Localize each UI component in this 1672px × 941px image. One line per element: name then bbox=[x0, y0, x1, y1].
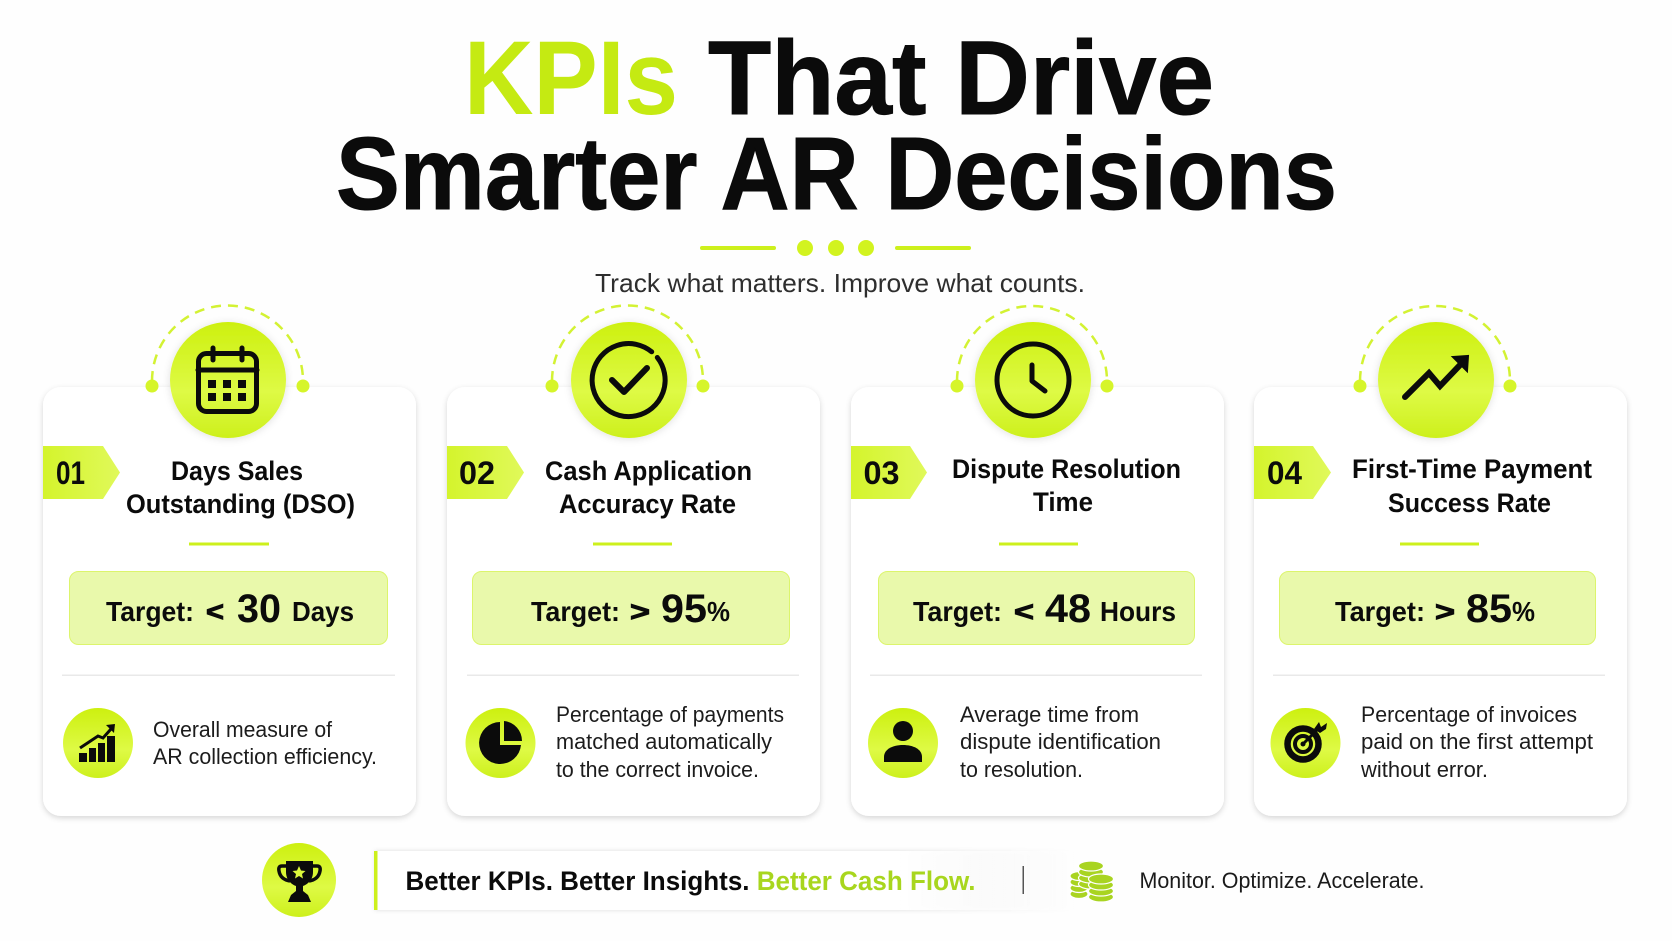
footer slogan: Monitor. Optimize. Accelerate. bbox=[1140, 868, 1424, 893]
card title bbox=[545, 456, 752, 519]
card title: Dispute Resolution bbox=[952, 454, 1181, 484]
target box: % bbox=[707, 596, 730, 627]
card title: Accuracy Rate bbox=[559, 489, 736, 519]
divider with dots bbox=[700, 240, 971, 256]
number badge 04 bbox=[1254, 446, 1331, 499]
description bbox=[960, 702, 1161, 782]
description: without error. bbox=[1360, 757, 1488, 782]
target box: % bbox=[1512, 596, 1535, 627]
title bbox=[336, 20, 1337, 231]
target box: Target: bbox=[531, 596, 620, 627]
card title: First-Time Payment bbox=[1352, 454, 1592, 484]
number badge 01: 01 bbox=[56, 455, 85, 491]
number badge 02 bbox=[447, 446, 524, 499]
card title: Days Sales bbox=[171, 456, 303, 486]
subtitle: Track what matters. Improve what counts. bbox=[595, 268, 1085, 298]
title: That Drive bbox=[708, 20, 1214, 137]
target box bbox=[878, 572, 1194, 644]
panel: card 01 Days Sales Outstanding bbox=[43, 306, 416, 816]
title: KPIs bbox=[464, 20, 678, 137]
panel: card 02 Cash Application Accuracy Rate bbox=[447, 306, 820, 816]
target box: Target: bbox=[106, 596, 194, 627]
description bbox=[153, 717, 377, 769]
target box bbox=[1280, 572, 1596, 644]
target box: 30 bbox=[237, 587, 281, 631]
description: to resolution. bbox=[960, 757, 1083, 782]
footer tagline: Better KPIs. Better Insights. Better Cash Flow. bbox=[406, 866, 976, 896]
icon: target bbox=[1270, 708, 1340, 778]
number badge 01 bbox=[43, 446, 120, 499]
description: dispute identification bbox=[960, 729, 1161, 754]
icon: dashed arc bbox=[1354, 306, 1516, 392]
number badge 03 bbox=[851, 446, 927, 499]
target box: Days bbox=[292, 596, 354, 627]
target box: Target: bbox=[1335, 596, 1425, 627]
number badge 02: 02 bbox=[459, 455, 495, 491]
card title bbox=[1352, 454, 1592, 518]
card title bbox=[126, 456, 355, 519]
target box: Hours bbox=[1100, 596, 1176, 627]
description bbox=[556, 702, 784, 782]
target box: < bbox=[206, 596, 224, 627]
number badge 03: 03 bbox=[864, 455, 900, 491]
icon: calendar bbox=[170, 322, 286, 438]
icon: dashed arc bbox=[546, 306, 710, 392]
target box bbox=[472, 572, 790, 644]
target box: > bbox=[1435, 596, 1455, 627]
icon: bar chart growth bbox=[63, 708, 133, 778]
card title: Outstanding (DSO) bbox=[126, 489, 355, 519]
panel: card 03 Dispute Resolution Time bbox=[851, 306, 1224, 816]
description: AR collection efficiency. bbox=[153, 744, 377, 769]
card title bbox=[952, 454, 1181, 517]
description: matched automatically bbox=[556, 729, 772, 754]
target box: Target: bbox=[913, 596, 1002, 627]
description: paid on the first attempt bbox=[1361, 729, 1593, 754]
target box: 85 bbox=[1466, 587, 1512, 631]
icon: coins bbox=[1070, 861, 1114, 902]
icon: pie chart bbox=[466, 708, 536, 778]
description: Percentage of payments bbox=[556, 702, 784, 727]
panel: card 04 First-Time Payment Success Rate bbox=[1254, 306, 1627, 816]
footer banner bbox=[374, 851, 1075, 910]
card title: Success Rate bbox=[1388, 488, 1551, 518]
icon: dashed arc bbox=[950, 306, 1114, 392]
description: Average time from bbox=[960, 702, 1139, 727]
target box bbox=[70, 572, 388, 644]
icon: check circle bbox=[571, 322, 687, 438]
card title: Time bbox=[1033, 487, 1093, 517]
target box: 95 bbox=[661, 587, 707, 631]
description bbox=[1360, 702, 1593, 782]
icon: trend arrow bbox=[1378, 322, 1494, 438]
title: Smarter AR Decisions bbox=[336, 116, 1337, 231]
card title: Cash Application bbox=[545, 456, 752, 486]
icon: person bbox=[868, 708, 938, 778]
number badge 04: 04 bbox=[1267, 455, 1302, 491]
target box: < bbox=[1014, 596, 1034, 627]
description: Overall measure of bbox=[153, 717, 333, 742]
icon: trophy bbox=[262, 843, 336, 917]
icon: clock bbox=[975, 322, 1091, 438]
icon: dashed arc bbox=[146, 306, 310, 392]
target box: 48 bbox=[1045, 587, 1091, 631]
description: to the correct invoice. bbox=[556, 757, 759, 782]
description: Percentage of invoices bbox=[1361, 702, 1577, 727]
target box: > bbox=[630, 596, 650, 627]
